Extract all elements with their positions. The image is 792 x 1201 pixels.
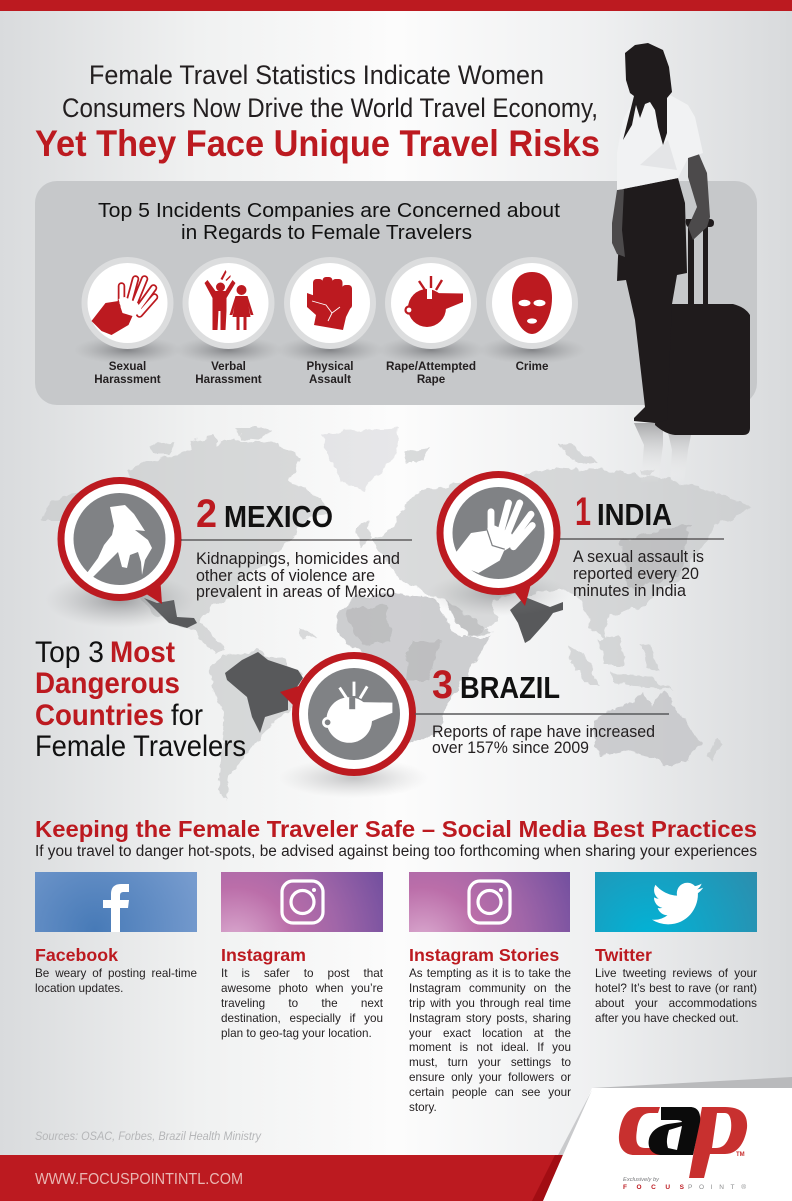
incident labels: Rape <box>417 373 446 386</box>
text: Instagram Stories: your exact location at the <box>409 1027 571 1040</box>
text: Instagram <box>221 945 383 1040</box>
logo: cap <box>619 1107 747 1191</box>
country block: India: A sexual assault is <box>573 548 704 566</box>
heading: top 3 most dangerous countries: Female Travelers <box>35 730 246 763</box>
country block: Mexico: Kidnappings, homicides and <box>196 550 400 568</box>
top red bar <box>0 0 792 11</box>
incident: physical assault <box>284 257 376 349</box>
hair <box>623 43 672 145</box>
icon: bound woman <box>87 505 152 578</box>
incident: sexual harassment <box>82 257 174 349</box>
panel heading <box>98 199 560 244</box>
text: Instagram Stories: Instagram story posts, sharing <box>409 1012 571 1025</box>
incident: crime <box>486 257 578 349</box>
country block: Mexico: MEXICO <box>224 499 333 534</box>
country block: Brazil: Reports of rape have increased <box>432 723 655 741</box>
text: Instagram: awesome photo when you’re <box>221 982 383 995</box>
country block: Brazil <box>415 663 669 757</box>
text: Instagram: plan to geo-tag your location. <box>221 1027 372 1040</box>
leg reflection <box>634 423 692 483</box>
incident labels: Assault <box>309 373 351 386</box>
tile: Instagram Stories <box>409 872 570 932</box>
incident labels: Harassment <box>94 373 161 386</box>
text: Instagram: Instagram <box>221 945 306 965</box>
country block: India: INDIA <box>597 497 672 532</box>
footer band <box>0 1155 563 1201</box>
text: Twitter: about your accommodations <box>595 997 757 1010</box>
text: Instagram Stories: Instagram community on the <box>409 982 571 995</box>
marker: India <box>440 474 557 606</box>
incident: rape / attempted rape <box>385 257 477 349</box>
country block: India: reported every 20 <box>573 565 699 583</box>
logo: cap: TM <box>736 1152 745 1158</box>
highlighted country: Brazil <box>225 652 303 733</box>
text: Instagram: traveling to the next <box>221 997 383 1010</box>
text: Instagram: It is safer to post that <box>221 967 383 980</box>
text: Instagram Stories: moment is not ideal. If you <box>409 1041 571 1054</box>
country block: Mexico <box>181 492 412 601</box>
legs and skirt <box>617 178 687 423</box>
country block: Brazil: BRAZIL <box>460 670 560 705</box>
heading: top 3 most dangerous countries <box>35 636 246 763</box>
heading: top 3 most dangerous countries: Countries <box>35 699 164 732</box>
incident: verbal harassment <box>182 257 274 349</box>
incident labels: Verbal <box>211 360 246 373</box>
panel: top 5 incidents <box>35 181 757 405</box>
text: Instagram Stories: trip with you through real time <box>409 997 571 1010</box>
heading: social media best practices <box>35 816 757 860</box>
heading: social media best practices: If you travel to danger hot-spots, be advised against being too forthcoming when sharing your experiences <box>35 843 757 860</box>
text: Instagram Stories: ensure only your followers or <box>409 1071 571 1084</box>
heading: top 3 most dangerous countries: Top 3 <box>35 636 104 669</box>
text: Instagram Stories: Instagram Stories <box>409 945 559 965</box>
text: Facebook: location updates. <box>35 982 123 995</box>
marker: Mexico <box>61 480 178 604</box>
text: Twitter: hotel? It’s best to rave (or rant) <box>595 982 757 995</box>
logo: cap: POINT® <box>688 1183 746 1191</box>
panel heading: in Regards to Female Travelers <box>181 221 472 244</box>
incident labels: Rape/Attempted <box>386 360 476 373</box>
highlighted country: Mexico <box>144 598 197 628</box>
heading: top 3 most dangerous countries: Most <box>110 636 175 669</box>
marker: Brazil <box>280 656 412 772</box>
tile: Twitter <box>595 872 757 932</box>
text: Instagram Stories <box>409 945 571 1114</box>
text: Facebook: Facebook <box>35 945 118 965</box>
title: Consumers Now Drive the World Travel Economy, <box>62 93 598 123</box>
suitcase handle <box>686 219 714 304</box>
incident labels: Physical <box>306 360 354 373</box>
text: Facebook: Be weary of posting real-time <box>35 967 197 980</box>
title: Yet They Face Unique Travel Risks <box>35 123 600 164</box>
text: Instagram Stories: certain people can see your <box>409 1086 571 1099</box>
right arm <box>688 152 710 240</box>
country block: Brazil: over 157% since 2009 <box>432 739 589 757</box>
left arm <box>612 189 625 257</box>
country block: Mexico: 2 <box>196 492 217 536</box>
text: Twitter: after you have checked out. <box>595 1012 739 1025</box>
text: Instagram Stories: story. <box>409 1101 437 1114</box>
country block: Mexico: prevalent in areas of Mexico <box>196 583 395 601</box>
text: Instagram Stories: As tempting as it is to take the <box>409 967 571 980</box>
shirt <box>617 95 703 190</box>
heading: social media best practices: Keeping the Female Traveler Safe – Social Media Best Practices <box>35 816 757 842</box>
title <box>35 60 600 164</box>
text: Twitter: Twitter <box>595 945 652 965</box>
incident labels: Harassment <box>195 373 262 386</box>
logo: cap: FOCUS <box>623 1184 685 1191</box>
country block: India <box>560 490 724 600</box>
tile: Instagram <box>221 872 383 932</box>
country block: India: minutes in India <box>573 582 687 600</box>
shadows under country markers <box>45 572 570 798</box>
logo: cap: Exclusively by <box>623 1177 660 1183</box>
icon: grabbing hand <box>454 503 532 573</box>
incident labels: Sexual <box>109 360 146 373</box>
country block: India: 1 <box>575 490 591 534</box>
text: Instagram: destination, especially if you <box>221 1012 383 1025</box>
heading: top 3 most dangerous countries: Dangerous <box>35 667 180 700</box>
text: Facebook <box>35 945 197 995</box>
incident labels: Crime <box>516 360 549 373</box>
logo corner panel <box>543 1077 792 1201</box>
title: Female Travel Statistics Indicate Women <box>89 60 544 90</box>
country block: Mexico: other acts of violence are <box>196 567 375 585</box>
world map <box>40 428 752 800</box>
icon shadows <box>74 336 586 364</box>
tile: Facebook <box>35 872 197 932</box>
text: Twitter <box>595 945 757 1025</box>
panel heading: Top 5 Incidents Companies are Concerned about <box>98 199 560 222</box>
heading: top 3 most dangerous countries: for <box>171 699 203 732</box>
icon: whistle <box>323 682 392 743</box>
country block: Brazil: 3 <box>432 663 453 707</box>
incident labels <box>94 360 549 386</box>
footer band: WWW.FOCUSPOINTINTL.COM <box>35 1171 243 1188</box>
woman with suitcase silhouette <box>612 43 750 483</box>
highlighted country: India <box>510 597 563 643</box>
sources: Sources: OSAC, Forbes, Brazil Health Ministry <box>35 1131 262 1143</box>
text: Instagram Stories: must, turn your settings to <box>409 1056 571 1069</box>
text: Twitter: Live tweeting reviews of your <box>595 967 757 980</box>
suitcase <box>655 304 750 435</box>
